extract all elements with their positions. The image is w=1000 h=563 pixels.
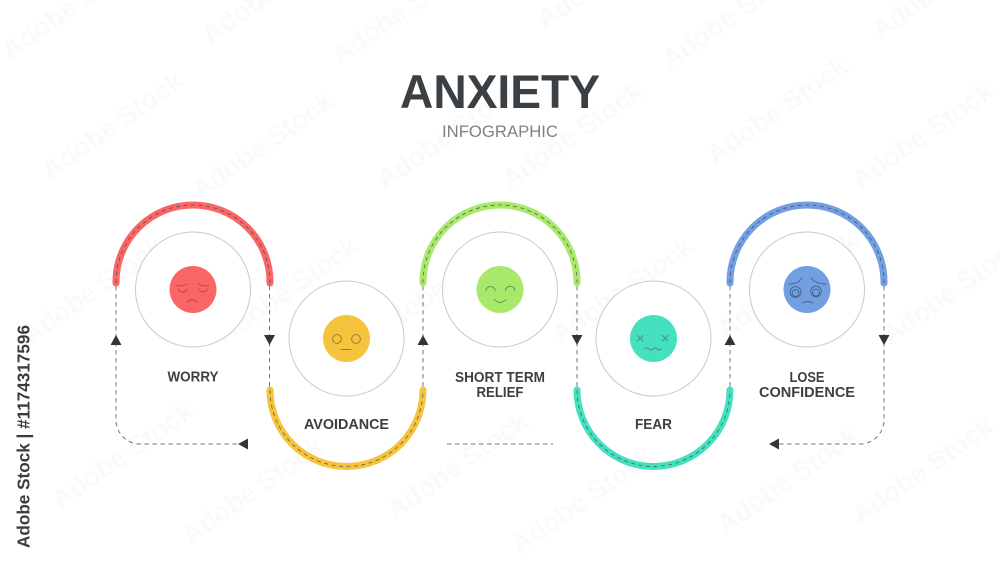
text: Adobe Stock (546, 230, 699, 350)
panel: avoidance (270, 281, 423, 466)
dashed connector: lose confidence path (776, 286, 884, 444)
dashed connector: short term relief to fear (576, 286, 578, 388)
label: short term relief: SHORT TERM (455, 370, 545, 386)
arrow: left bottom-left (238, 438, 248, 450)
label: avoidance: AVOIDANCE (304, 417, 389, 433)
label: lose confidence (759, 370, 855, 401)
label: short term relief: RELIEF (476, 385, 524, 401)
text: Adobe Stock (506, 440, 659, 560)
arrow: down to avoidance (264, 335, 275, 345)
ring (596, 281, 711, 396)
text: Adobe Stock (371, 75, 524, 195)
text: Adobe Stock (186, 85, 339, 205)
text: Adobe Stock (711, 420, 864, 540)
panel: short term relief (423, 205, 577, 401)
text: Adobe Stock (36, 65, 189, 185)
panel: fear (577, 281, 730, 466)
arrow: up left (110, 335, 122, 345)
label: short term relief (455, 370, 545, 401)
stock id side text: Adobe Stock | #1174317596 (14, 325, 34, 548)
yellow arc (270, 390, 423, 466)
arrow: down right (878, 335, 890, 345)
panel: lose confidence (730, 205, 884, 401)
arrow: up from fear (724, 335, 736, 345)
blue arc (730, 205, 884, 283)
text: Adobe Stock (16, 230, 169, 350)
label: lose confidence: CONFIDENCE (759, 385, 855, 401)
text: Adobe Stock (46, 395, 199, 515)
icon: worried face (170, 266, 216, 313)
ring (442, 232, 558, 347)
dashed connector: centre bottom (447, 443, 553, 445)
icon: dizzy face (630, 315, 677, 362)
title: ANXIETY (400, 65, 600, 118)
text: Adobe Stock (846, 75, 999, 195)
icon: smiling face (476, 266, 524, 313)
text: Adobe Stock (366, 225, 519, 345)
arrow: left bottom-right (769, 438, 779, 450)
icon: blank face (323, 315, 370, 362)
text: Adobe Stock (846, 410, 999, 530)
dashed connector: worry to avoidance (268, 286, 270, 388)
text: Adobe Stock (701, 50, 854, 170)
text: Adobe Stock (711, 225, 864, 345)
arrow: up from avoidance (418, 335, 428, 345)
dashed connector: worry return path (116, 286, 240, 444)
green arc (423, 205, 577, 283)
dashed connector: avoidance to short term relief (422, 286, 424, 388)
text: Adobe Stock (176, 430, 329, 550)
arrow: down to fear (572, 335, 582, 345)
subtitle: INFOGRAPHIC (442, 122, 558, 141)
ring (750, 232, 864, 347)
ring (136, 232, 250, 347)
icon: sad teary face (784, 266, 830, 313)
label: lose confidence: LOSE (790, 370, 825, 386)
text: Adobe Stock (211, 230, 364, 350)
panel: worry (116, 205, 270, 386)
red arc (116, 205, 270, 283)
label: worry: WORRY (168, 370, 219, 386)
text: Adobe Stock (381, 405, 534, 525)
dashed connector: fear to lose confidence (729, 286, 731, 388)
label: fear: FEAR (635, 417, 672, 433)
teal arc (577, 390, 730, 466)
ring (289, 281, 404, 396)
text: Adobe Stock (496, 75, 649, 195)
